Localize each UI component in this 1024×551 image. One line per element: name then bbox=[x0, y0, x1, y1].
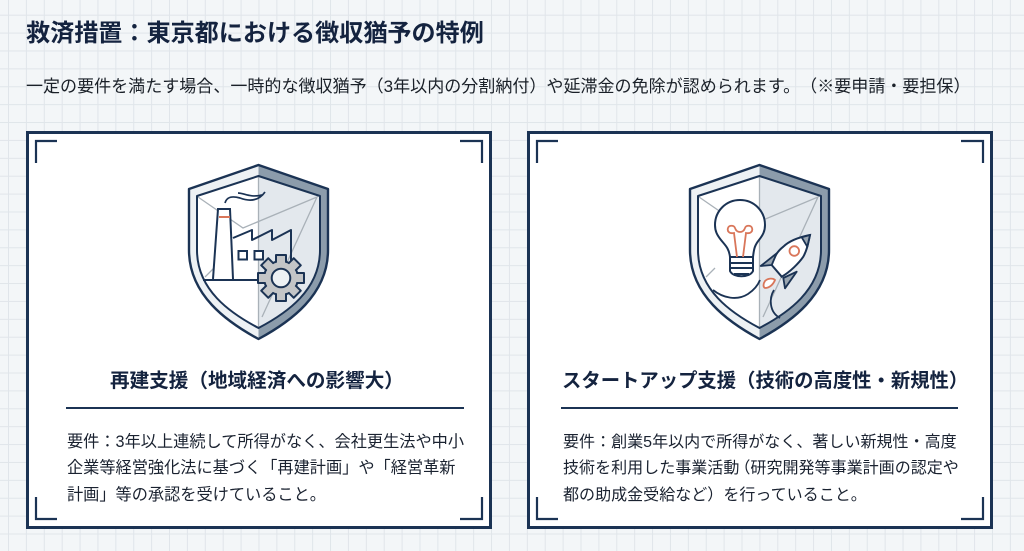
right card body text: 都の助成金受給など）を行っていること。 bbox=[563, 486, 867, 504]
subtitle: 一定の要件を満たす場合、一時的な徴収猶予（3年以内の分割納付）や延滞金の免除が認められます。（※要申請・要担保） bbox=[26, 77, 970, 96]
icon: corner brackets right card bbox=[537, 141, 983, 519]
left card body text: 要件：3年以上連続して所得がなく、会社更生法や中小 bbox=[67, 432, 464, 450]
right card body text: 要件：創業5年以内で所得がなく、著しい新規性・高度 bbox=[563, 432, 957, 450]
left card body text: 企業等経営強化法に基づく「再建計画」や「経営革新 bbox=[67, 459, 456, 477]
left card body text: 計画」等の承認を受けていること。 bbox=[67, 486, 326, 504]
icon: right shield with light bulb and rocket bbox=[690, 165, 829, 339]
left card body text bbox=[67, 432, 464, 504]
title: 救済措置：東京都における徴収猶予の特例 bbox=[26, 20, 484, 47]
panel: right card frame bbox=[527, 131, 993, 529]
right card body text: 技術を利用した事業活動（研究開発等事業計画の認定や bbox=[563, 459, 959, 477]
panel: left card frame bbox=[26, 131, 492, 529]
icon: left shield with factory and gear bbox=[189, 165, 328, 339]
right card divider bbox=[561, 407, 958, 409]
icon: corner brackets left card bbox=[36, 141, 482, 519]
left card heading: 再建支援（地域経済への影響大） bbox=[110, 370, 404, 392]
left card divider bbox=[66, 407, 464, 409]
right card heading: スタートアップ支援（技術の高度性・新規性） bbox=[562, 370, 968, 392]
right card body text bbox=[563, 432, 959, 504]
